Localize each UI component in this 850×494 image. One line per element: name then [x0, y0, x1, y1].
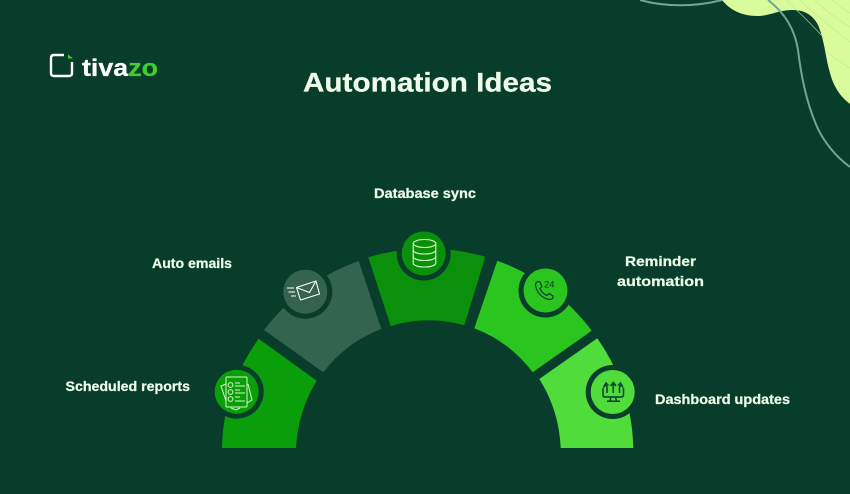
icon: logo mark	[51, 55, 72, 76]
label: scheduled reports: Scheduled reports	[66, 379, 190, 394]
segment: database sync	[368, 248, 485, 326]
icon: scheduled reports checklist	[210, 365, 264, 419]
segment: dashboard updates	[539, 338, 633, 448]
title: Automation Ideas	[303, 68, 552, 98]
icon: auto emails envelope	[278, 265, 332, 319]
logo: tivazo	[51, 54, 158, 82]
label: auto emails: Auto emails	[152, 256, 232, 271]
icon: reminder phone 24	[518, 264, 572, 318]
label: database sync: Database sync	[374, 186, 477, 201]
label: reminder automation: automation	[617, 274, 704, 289]
segment: reminder automation	[474, 261, 592, 372]
decorative corner blob	[640, 0, 850, 167]
icon: dashboard monitor arrows	[586, 365, 640, 419]
segment: auto emails	[264, 261, 381, 372]
label: dashboard updates: Dashboard updates	[655, 392, 790, 407]
logo wordmark: tivazo	[82, 55, 158, 82]
icon: logo accent	[68, 54, 73, 58]
segment: scheduled reports	[222, 339, 317, 448]
label: reminder automation	[617, 254, 704, 289]
label: reminder automation: Reminder	[625, 254, 697, 269]
icon: reminder phone 24: 24	[544, 280, 554, 290]
icon: database	[397, 226, 451, 280]
